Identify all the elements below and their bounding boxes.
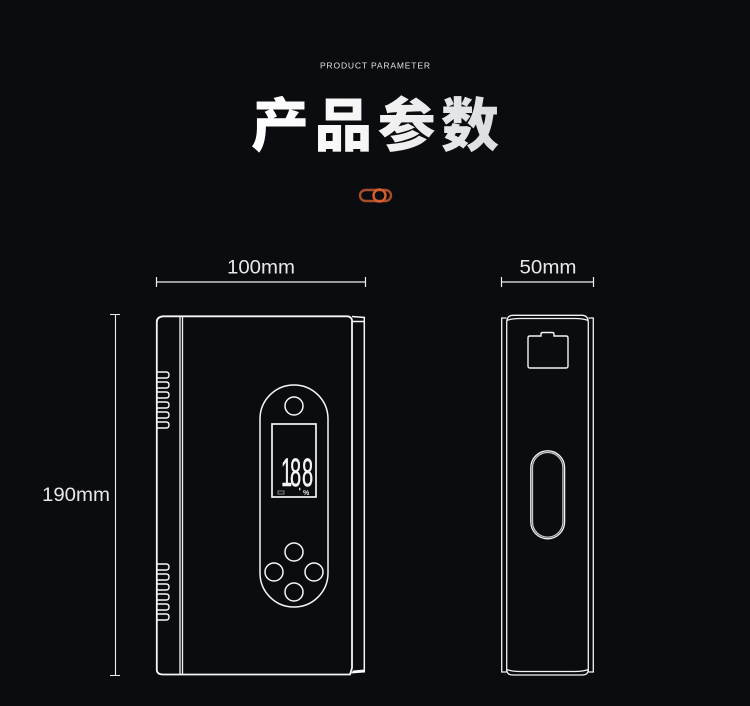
bottom right wedge bbox=[351, 670, 364, 674]
side body inner bbox=[507, 315, 588, 675]
icon: orange linked rings bbox=[360, 190, 391, 202]
display reading: 8 bbox=[302, 449, 313, 495]
percent sign: % bbox=[303, 490, 310, 497]
display reading: . bbox=[298, 475, 301, 495]
display reading: 8 bbox=[290, 449, 301, 495]
device front view bbox=[157, 316, 364, 675]
top button bbox=[285, 397, 303, 415]
body outline bbox=[157, 316, 352, 674]
device side view bbox=[502, 315, 593, 675]
battery indicator bbox=[278, 491, 284, 494]
dimension: depth 50mm: 50mm bbox=[520, 256, 576, 278]
display reading: 1 bbox=[281, 449, 292, 495]
dimension: height 190mm bbox=[42, 314, 120, 676]
dimension: depth 50mm bbox=[502, 256, 594, 287]
left double seam bbox=[180, 317, 182, 675]
port socket bbox=[528, 332, 568, 368]
button cluster bbox=[265, 543, 323, 601]
subtitle: PRODUCT PARAMETER bbox=[320, 60, 430, 70]
lower vent ribs bbox=[157, 564, 169, 620]
display window bbox=[272, 424, 316, 497]
dimension: height 190mm: 190mm bbox=[42, 484, 110, 506]
dimension: width 100mm bbox=[156, 256, 366, 287]
control panel bbox=[260, 385, 328, 607]
title: 产品参数 bbox=[251, 79, 499, 163]
oval button bbox=[531, 451, 565, 539]
upper vent ribs bbox=[157, 372, 169, 428]
dimension: width 100mm: 100mm bbox=[227, 256, 295, 278]
right side edge bbox=[352, 316, 364, 672]
side body outer bbox=[502, 318, 593, 672]
